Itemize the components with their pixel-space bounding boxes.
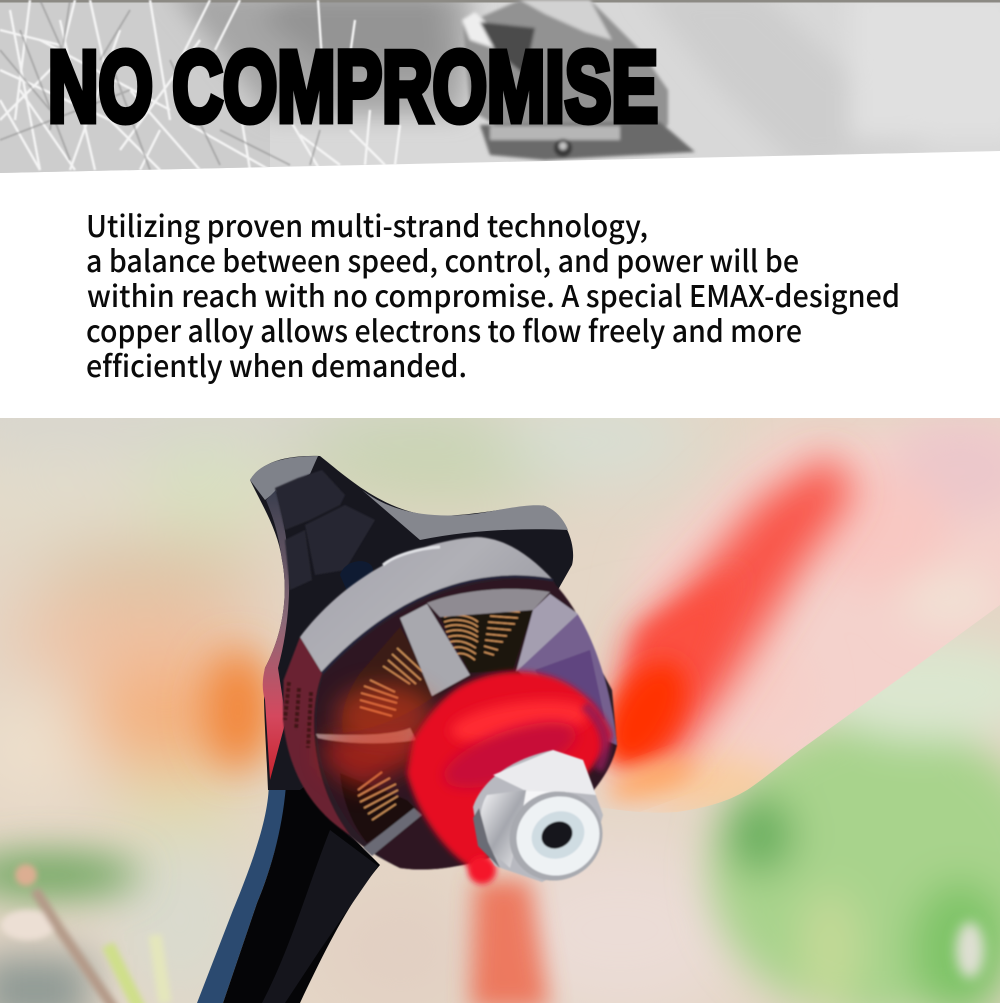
front face (317, 580, 617, 870)
description text block: copper alloy allows electrons to flow freely and more (86, 307, 802, 351)
blurred field background (0, 380, 1000, 1003)
header photo: greyscale grass and motor (0, 0, 1000, 175)
description text block: within reach with no compromise. A special EMAX-designed (87, 272, 900, 316)
description text block: a balance between speed, control, and power will be (86, 237, 799, 281)
printed label on motor (285, 682, 311, 748)
silver outer band (300, 537, 553, 673)
motor bell (283, 537, 617, 870)
product photo: blurred background with motor (0, 380, 1000, 1003)
carbon fibre mount (250, 456, 573, 790)
copper windings (358, 610, 520, 820)
red motion blur hub (325, 672, 612, 884)
arm and cable (197, 786, 380, 1003)
bell spokes (400, 604, 470, 696)
description text block: Utilizing proven multi-strand technology, (86, 202, 648, 246)
blurred propeller blade (470, 420, 1000, 1003)
description text block: efficiently when demanded. (86, 342, 467, 386)
description text block (86, 202, 900, 386)
blurred green foliage (710, 640, 1000, 1003)
motor side with print (283, 637, 350, 835)
hex nut and shaft (472, 749, 604, 882)
stator windows (342, 627, 432, 733)
title: NO COMPROMISE (48, 31, 658, 143)
